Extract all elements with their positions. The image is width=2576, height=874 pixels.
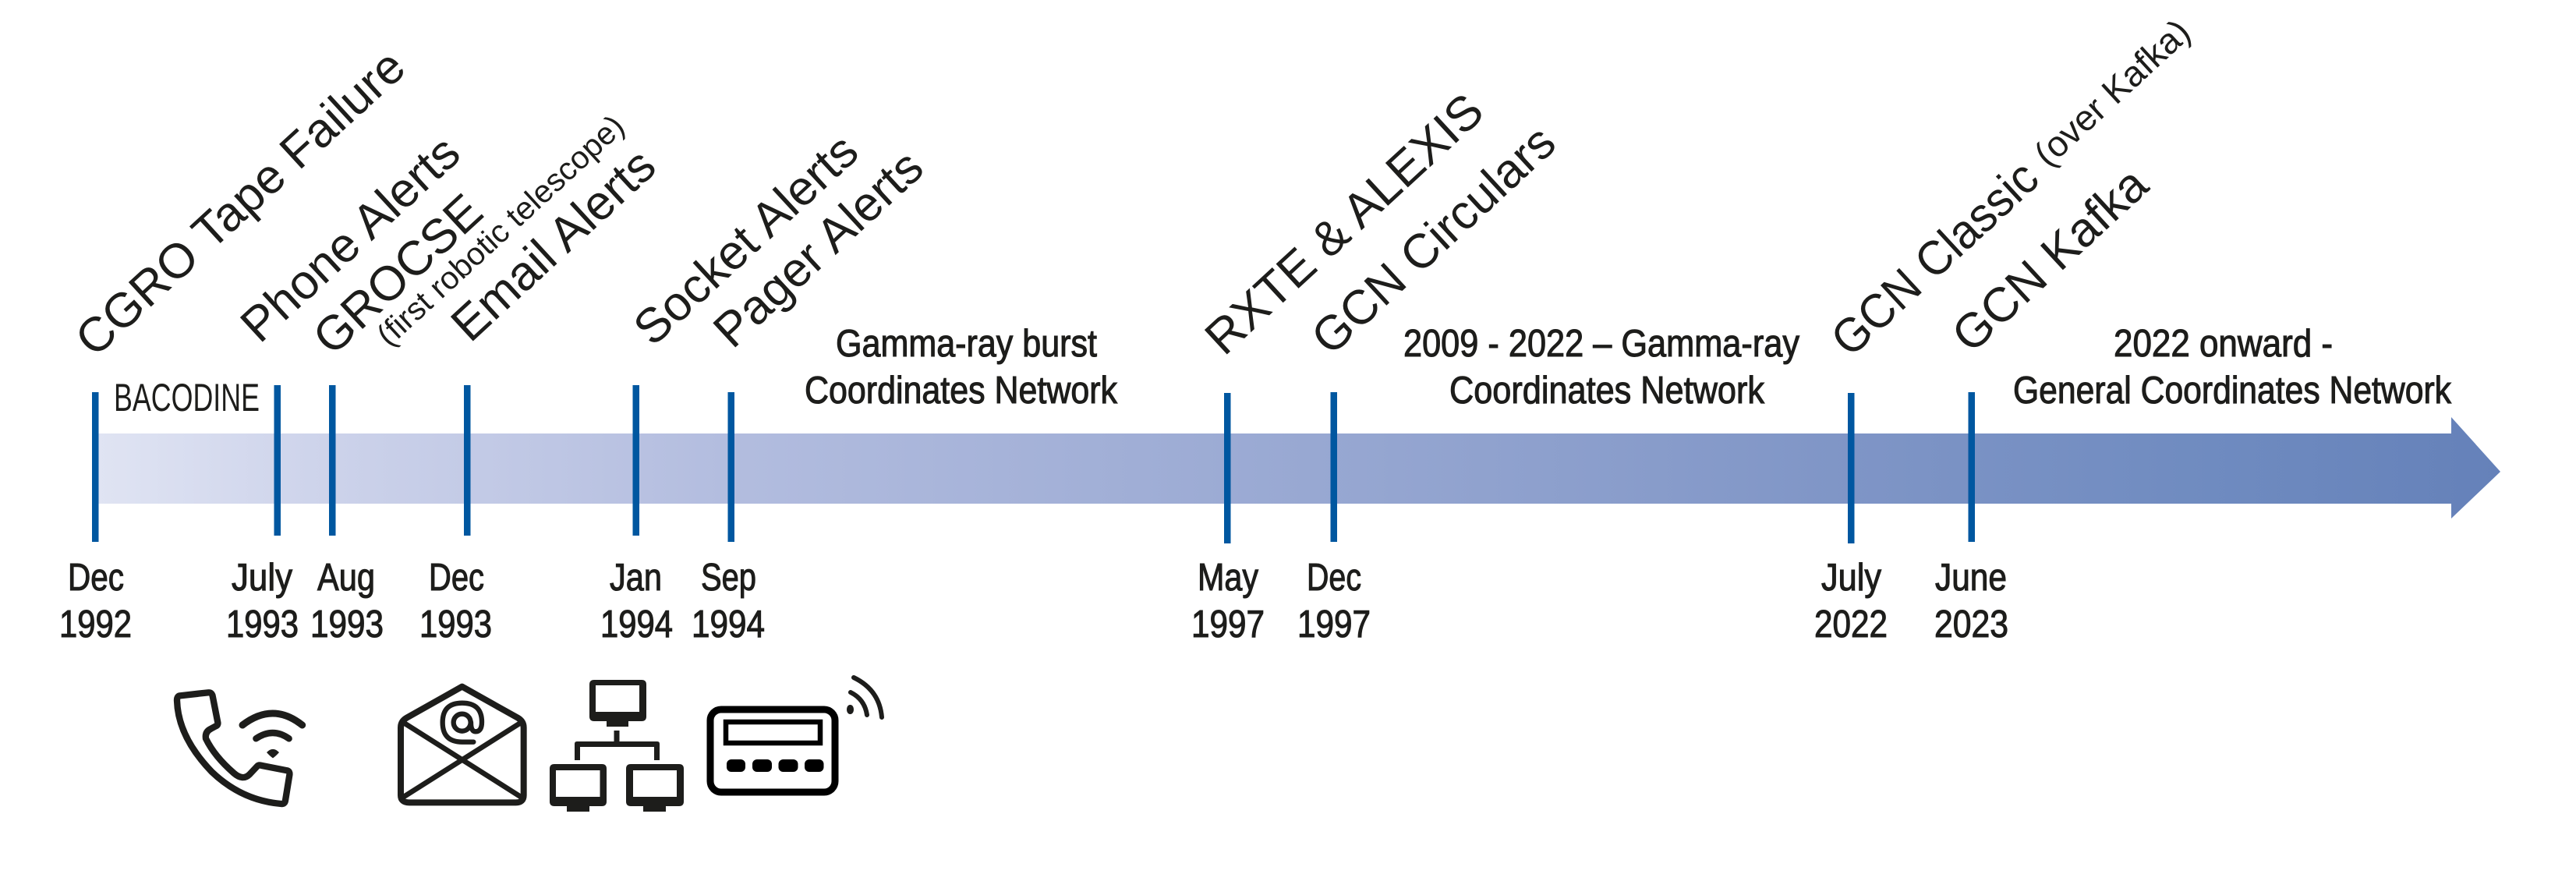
date: May 1997: May [1198, 557, 1258, 599]
date: July 2022 [1814, 557, 1888, 646]
label: over Kafka: (over Kafka) [2026, 11, 2198, 174]
label: GROCSE: GROCSE [303, 184, 493, 365]
date: Sep 1994: 1994 [692, 603, 765, 646]
label: Phone Alerts: Phone Alerts [231, 126, 470, 352]
era: 2009 - 2022 Gamma-ray Coordinates Network: 2009 - 2022 – Gamma-ray [1403, 323, 1799, 365]
label: GCN Circulars: GCN Circulars [1301, 115, 1566, 365]
label: CGRO Tape Failure: CGRO Tape Failure [65, 40, 416, 366]
top monitor [589, 680, 646, 727]
icon: email envelope [401, 687, 524, 802]
date: Sep 1994: Sep [701, 557, 756, 599]
date: Jan 1994: 1994 [600, 603, 673, 646]
era: Gamma-ray burst Coordinates Network: Coordinates Network [805, 370, 1117, 412]
label: Pager Alerts: Pager Alerts [703, 140, 933, 358]
label: Email Alerts: Email Alerts [441, 138, 666, 352]
icon: computer network [550, 680, 684, 812]
date: June 2023: June [1935, 557, 2007, 599]
date: Dec 1993 [419, 557, 492, 646]
date: Dec 1993: 1993 [419, 603, 492, 646]
era: 2009 - 2022 Gamma-ray Coordinates Network: Coordinates Network [1449, 370, 1764, 412]
date labels [59, 557, 2008, 646]
date: Aug 1993: 1993 [310, 603, 384, 646]
date: July 2022: 2022 [1814, 603, 1888, 646]
date: Dec 1992: Dec [68, 557, 124, 599]
BACODINE: BACODINE [114, 376, 260, 419]
label: GCN Classic: GCN Classic [1821, 150, 2049, 366]
label: first robotic telescope: (first robotic telescope) [370, 108, 631, 353]
era: 2022 onward General Coordinates Network [2013, 323, 2451, 412]
date: Dec 1997: Dec [1307, 557, 1361, 599]
pager buttons [727, 759, 823, 772]
era labels [114, 323, 2451, 419]
date: Dec 1997 [1297, 557, 1371, 646]
date: Dec 1997: 1997 [1297, 603, 1371, 646]
date: Dec 1992: 1992 [59, 603, 132, 646]
date: Dec 1992 [59, 557, 132, 646]
date: July 1993: July [232, 557, 292, 599]
left monitor [550, 764, 607, 812]
era: 2009 - 2022 Gamma-ray Coordinates Network [1403, 323, 1799, 412]
era: Gamma-ray burst Coordinates Network [805, 323, 1117, 412]
era: 2022 onward General Coordinates Network: General Coordinates Network [2013, 370, 2451, 412]
event labels [65, 11, 2198, 366]
date: July 1993 [226, 557, 299, 646]
label: GCN Kafka: GCN Kafka [1942, 157, 2159, 363]
date: May 1997: 1997 [1191, 603, 1265, 646]
era: 2022 onward General Coordinates Network: 2022 onward - [2114, 323, 2333, 365]
right monitor [626, 764, 684, 812]
pager screen [726, 722, 820, 743]
timeline arrow [95, 417, 2500, 518]
date: Aug 1993: Aug [317, 557, 375, 599]
date: May 1997 [1191, 557, 1265, 646]
date: June 2023: 2023 [1934, 603, 2008, 646]
date: July 2022: July [1821, 557, 1881, 599]
date: July 1993: 1993 [226, 603, 299, 646]
icon: pager [710, 678, 882, 792]
timeline tick marks [92, 385, 1975, 543]
date: Jan 1994: Jan [610, 557, 662, 599]
date: Sep 1994 [692, 557, 765, 646]
network connector [575, 731, 660, 760]
date: Dec 1993: Dec [429, 557, 484, 599]
label: Socket Alerts: Socket Alerts [624, 124, 869, 356]
era: Gamma-ray burst Coordinates Network: Gamma-ray burst [836, 323, 1097, 365]
pager signal [849, 678, 882, 717]
icon: phone with wifi signal [177, 692, 303, 804]
date: Jan 1994 [600, 557, 673, 646]
label: RXTE and ALEXIS: RXTE & ALEXIS [1195, 83, 1494, 365]
date: June 2023 [1934, 557, 2008, 646]
date: Aug 1993 [310, 557, 384, 646]
pager body [710, 709, 835, 792]
